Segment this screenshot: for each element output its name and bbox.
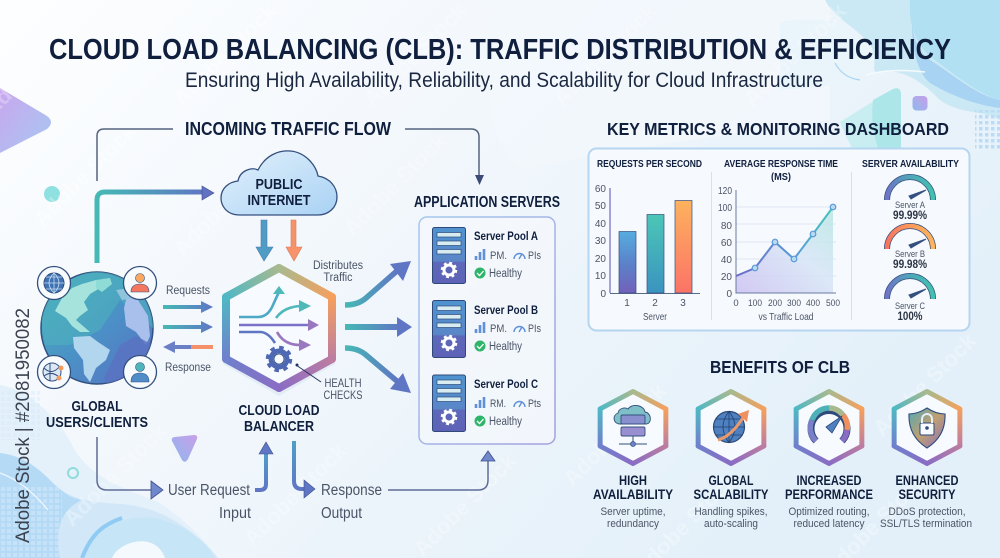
chart: average response time: 40 bbox=[721, 255, 732, 266]
chart: requests per second: Server bbox=[643, 311, 667, 323]
benefit: high availability: redundancy bbox=[607, 518, 659, 530]
arrow: response bbox=[163, 341, 213, 353]
chart: requests per second: 2 bbox=[652, 298, 658, 309]
chart: requests per second: 40 bbox=[595, 219, 606, 230]
watermark: Adobe Stock bbox=[738, 0, 852, 111]
arrow: balancer to response bbox=[294, 441, 315, 498]
server pool b: PM. bbox=[490, 323, 507, 335]
server pool c: Server Pool C bbox=[474, 377, 538, 391]
panel: incoming traffic flow bbox=[38, 119, 495, 522]
icon: gear bbox=[268, 348, 290, 370]
chart: average response time: 300 bbox=[787, 298, 801, 309]
chart: average response time: 120 bbox=[718, 186, 732, 197]
benefit: global scalability: auto-scaling bbox=[704, 518, 758, 530]
icon: public internet cloud: INTERNET bbox=[248, 193, 311, 209]
watermark: Adobe Stock bbox=[358, 0, 472, 111]
chart: requests per second bbox=[595, 158, 702, 323]
watermark: Adobe Stock bbox=[548, 0, 662, 111]
chart: requests per second: REQUESTS PER SECOND bbox=[597, 158, 702, 170]
benefit: increased performance: INCREASED bbox=[796, 473, 862, 488]
chart: average response time: 0 bbox=[726, 289, 732, 300]
icon: public internet cloud: PUBLIC bbox=[256, 177, 303, 193]
arrow: internet to balancer blue bbox=[256, 220, 273, 261]
label: global users: GLOBAL bbox=[72, 398, 122, 415]
icon: server c bbox=[432, 375, 466, 432]
gauge: server b: Server B bbox=[895, 249, 925, 260]
stock id vertical text: Adobe Stock | #2081950082 bbox=[13, 308, 34, 543]
gauge: server a: Server A bbox=[895, 200, 926, 211]
label: health checks: HEALTH bbox=[324, 376, 362, 390]
gauge: server b: 99.98% bbox=[893, 257, 927, 271]
arrow: balancer to pool a bbox=[345, 261, 411, 305]
arrow: internet to balancer orange bbox=[286, 220, 302, 261]
arrow: request two bbox=[163, 321, 213, 333]
icon: user badge blue bbox=[124, 356, 156, 388]
chart: average response time: 100 bbox=[748, 298, 762, 309]
chart: average response time bbox=[718, 158, 840, 323]
chart: average response time: 200 bbox=[768, 298, 782, 309]
benefit: global scalability bbox=[694, 392, 768, 530]
chart: average response time: 500 bbox=[826, 298, 840, 309]
arrow: balancer to pool b bbox=[345, 317, 412, 337]
chart: server availability gauges bbox=[862, 158, 959, 323]
label: cloud load balancer: BALANCER bbox=[244, 418, 314, 435]
icon: server a bbox=[432, 228, 466, 284]
benefit: global scalability: Handling spikes, bbox=[694, 506, 768, 518]
server pool a: PIs bbox=[528, 250, 541, 262]
label: response output: Output bbox=[321, 505, 363, 522]
chart: requests per second: 0 bbox=[600, 289, 606, 300]
server pool b bbox=[432, 300, 541, 358]
chart: requests per second: 20 bbox=[595, 254, 606, 265]
label: user request bbox=[168, 482, 252, 522]
chart: average response time: 80 bbox=[721, 221, 732, 232]
label: cloud load balancer bbox=[238, 402, 320, 435]
heading: benefits: BENEFITS OF CLB bbox=[710, 357, 850, 377]
server pool frame bbox=[419, 217, 555, 444]
heading: application servers: APPLICATION SERVERS bbox=[414, 194, 560, 211]
arrow: balancer to pool c bbox=[345, 348, 411, 393]
server pool b: Healthy bbox=[489, 341, 522, 353]
chart: requests per second: 1 bbox=[624, 298, 630, 309]
arrow: flow bracket to servers bbox=[405, 129, 484, 185]
icon: network map badge bbox=[38, 356, 70, 388]
watermark: Adobe Stock bbox=[868, 328, 982, 441]
watermark: Adobe Stock bbox=[338, 128, 452, 241]
connector: response to servers bbox=[388, 451, 495, 490]
benefit: enhanced security: DDoS protection, bbox=[888, 506, 966, 518]
server pool a: PM. bbox=[490, 250, 507, 262]
chart: server availability gauges: SERVER AVAILABILITY bbox=[862, 158, 959, 170]
icon: routing arrows bbox=[239, 292, 310, 345]
chart: requests per second: 50 bbox=[595, 201, 606, 212]
benefit: global scalability: SCALABILITY bbox=[694, 487, 768, 502]
watermark: Adobe Stock bbox=[168, 0, 282, 111]
label: distributes traffic bbox=[313, 260, 363, 284]
gauge: server c: Server C bbox=[895, 301, 925, 312]
arrow: clients to internet bbox=[97, 186, 214, 263]
icon: cloud servers bbox=[600, 392, 666, 464]
icon: shield and lock bbox=[894, 392, 960, 464]
label: user request: Input bbox=[219, 505, 252, 522]
gauge: server c: 100% bbox=[898, 309, 923, 323]
server pool a: Server Pool A bbox=[474, 229, 538, 243]
server pool a bbox=[432, 228, 541, 284]
gauge: server b bbox=[887, 226, 933, 271]
watermark: Adobe Stock bbox=[58, 418, 172, 531]
watermark: Adobe Stock bbox=[558, 378, 672, 491]
benefit: high availability: Server uptime, bbox=[600, 506, 666, 518]
server pool c bbox=[432, 375, 541, 432]
benefit: global scalability: GLOBAL bbox=[708, 473, 754, 488]
subtitle: Ensuring High Availability, Reliability, and Scalability for Cloud Infrastructure bbox=[185, 69, 823, 92]
benefit: high availability: AVAILABILITY bbox=[593, 487, 673, 502]
server pool b: PIs bbox=[528, 323, 541, 335]
connector: flow bracket left bbox=[97, 129, 173, 181]
panel: benefits of clb bbox=[593, 357, 972, 530]
chart: requests per second: 3 bbox=[680, 298, 686, 309]
watermark: Adobe Stock bbox=[238, 438, 352, 551]
panel: application servers bbox=[414, 194, 560, 444]
chart: requests per second: 10 bbox=[595, 271, 606, 282]
chart: average response time: 20 bbox=[721, 272, 732, 283]
gauge: server c bbox=[887, 276, 933, 323]
icon: globe with users bbox=[38, 266, 156, 392]
label: requests: Requests bbox=[166, 283, 210, 297]
server pool b: Server Pool B bbox=[474, 303, 538, 317]
icon: server b bbox=[432, 300, 466, 358]
benefit: high availability bbox=[593, 392, 673, 530]
connector: clients to user request bbox=[97, 437, 163, 499]
label: response: Response bbox=[165, 360, 211, 374]
heading: incoming traffic flow: INCOMING TRAFFIC FLOW bbox=[185, 119, 391, 139]
benefit: increased performance: reduced latency bbox=[794, 518, 865, 530]
icon: user badge orange bbox=[124, 266, 156, 300]
chart: average response time: (MS) bbox=[771, 171, 791, 183]
arrow: request one bbox=[163, 301, 213, 313]
watermark: Adobe Stock bbox=[408, 448, 522, 558]
label: health checks: CHECKS bbox=[324, 388, 362, 402]
label: response output bbox=[321, 482, 382, 522]
label: cloud load balancer: CLOUD LOAD bbox=[238, 402, 320, 419]
arrow: user request to balancer bbox=[255, 442, 273, 490]
benefit: enhanced security: SECURITY bbox=[898, 487, 956, 502]
chart: average response time: AVERAGE RESPONSE TIME bbox=[724, 158, 838, 170]
watermark: Adobe Stock bbox=[168, 148, 282, 261]
label: global users bbox=[46, 398, 148, 431]
label: response output: Response bbox=[321, 482, 382, 499]
label: user request: User Request bbox=[168, 482, 251, 499]
icon: cloud load balancer hexagon bbox=[223, 268, 335, 396]
watermark: Adobe Stock bbox=[28, 118, 142, 231]
benefit: enhanced security: SSL/TLS termination bbox=[880, 518, 972, 530]
heading: key metrics: KEY METRICS & MONITORING DASHBOARD bbox=[607, 119, 949, 139]
icon: public internet cloud bbox=[221, 151, 337, 215]
chart: average response time: vs Traffic Load bbox=[758, 311, 814, 323]
benefit: increased performance: PERFORMANCE bbox=[785, 487, 873, 502]
label: distributes traffic: Distributes bbox=[313, 260, 363, 272]
server pool c: Pts bbox=[528, 398, 541, 410]
chart: average response time: 0 bbox=[733, 298, 739, 309]
benefit: enhanced security bbox=[880, 392, 972, 530]
icon: speedometer bbox=[796, 392, 862, 464]
icon: globe with arrow bbox=[698, 392, 764, 464]
benefit: increased performance: Optimized routing, bbox=[788, 506, 870, 518]
server pool c: Healthy bbox=[489, 416, 522, 428]
icon: globe badge bbox=[38, 266, 70, 300]
label: health checks bbox=[296, 364, 362, 402]
chart: requests per second: 60 bbox=[595, 184, 606, 195]
label: global users: USERS/CLIENTS bbox=[46, 414, 148, 431]
label: distributes traffic: Traffic bbox=[324, 272, 353, 284]
gauge: server a: 99.99% bbox=[893, 208, 927, 222]
chart: average response time: 100 bbox=[718, 203, 732, 214]
benefit: increased performance bbox=[785, 392, 873, 530]
gauge: server a bbox=[887, 177, 933, 222]
server pool c: RM. bbox=[490, 398, 506, 410]
chart: average response time: 400 bbox=[806, 298, 820, 309]
chart: requests per second: 30 bbox=[595, 236, 606, 247]
benefit: enhanced security: ENHANCED bbox=[896, 473, 959, 488]
server pool a: Healthy bbox=[489, 268, 522, 280]
panel: monitoring dashboard bbox=[588, 148, 970, 330]
chart: average response time: 60 bbox=[721, 238, 732, 249]
benefit: high availability: HIGH bbox=[619, 473, 647, 488]
